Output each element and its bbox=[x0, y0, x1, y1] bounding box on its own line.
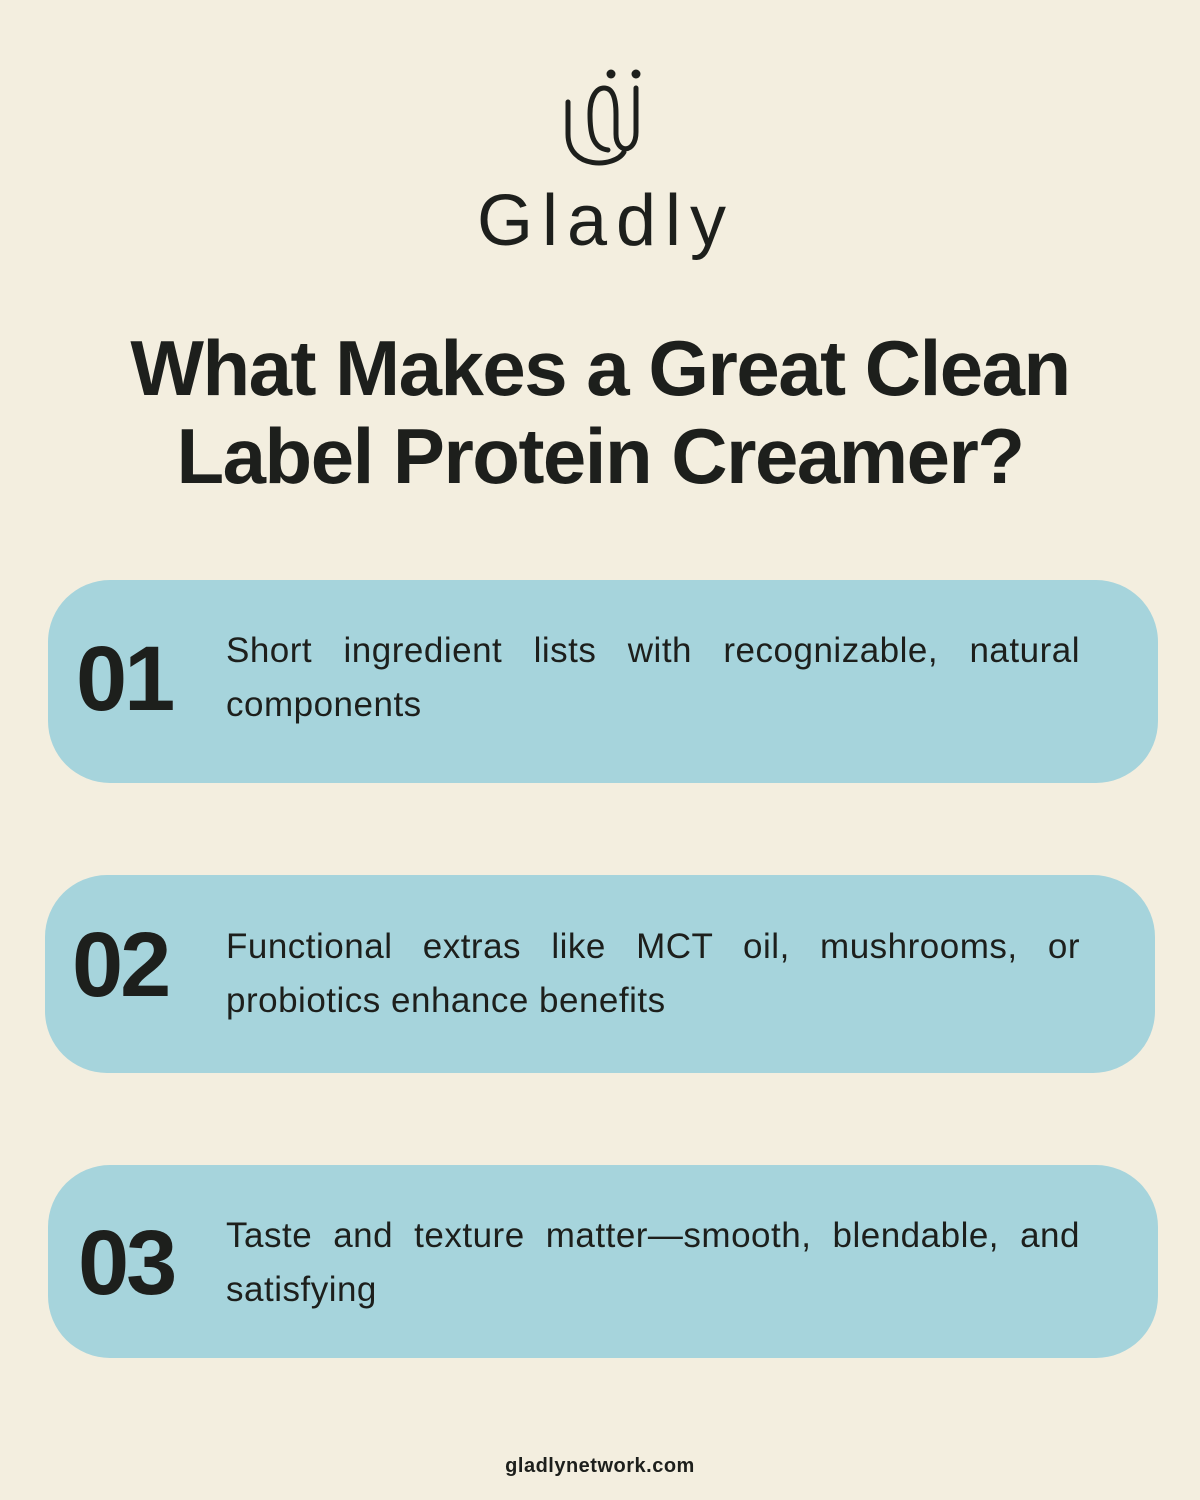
text 1: components bbox=[226, 685, 422, 724]
brand wordmark: Gladly bbox=[477, 181, 735, 261]
text 1: Short ingredient lists with recognizable, natural bbox=[226, 631, 1080, 670]
text 1 bbox=[226, 631, 1080, 724]
card 1 bbox=[48, 580, 1158, 783]
text 2 bbox=[226, 927, 1080, 1020]
card 3 bbox=[48, 1165, 1158, 1358]
card 2 bbox=[45, 875, 1155, 1073]
text 3: Taste and texture matter—smooth, blendable, and bbox=[226, 1216, 1080, 1255]
title: Label Protein Creamer? bbox=[177, 412, 1023, 500]
logo icon bbox=[566, 70, 640, 166]
footer url: gladlynetwork.com bbox=[505, 1455, 695, 1477]
title: What Makes a Great Clean bbox=[130, 324, 1070, 412]
number 01: 01 bbox=[76, 628, 172, 730]
number 02: 02 bbox=[72, 914, 168, 1016]
title bbox=[130, 324, 1070, 500]
text 2: probiotics enhance benefits bbox=[226, 981, 666, 1020]
text 3: satisfying bbox=[226, 1270, 377, 1309]
number 03: 03 bbox=[78, 1212, 174, 1314]
text 3 bbox=[226, 1216, 1080, 1309]
text 2: Functional extras like MCT oil, mushrooms, or bbox=[226, 927, 1080, 966]
